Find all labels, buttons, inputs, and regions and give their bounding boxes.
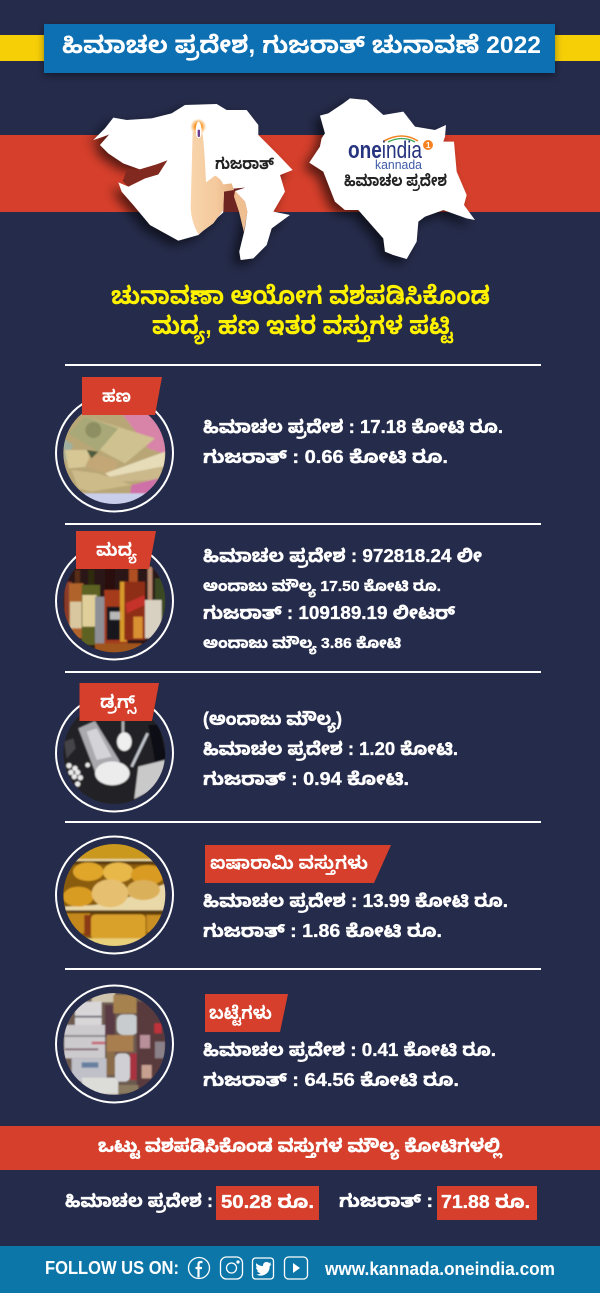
heading: list of seized items — [111, 282, 490, 345]
values: liquor: ಅಂದಾಜು ಮೌಲ್ಯ 3.86 ಕೋಟಿ — [203, 635, 401, 655]
image: drugs — [56, 694, 173, 812]
values: drugs — [203, 709, 458, 789]
icon: youtube — [284, 1257, 308, 1279]
follow us label: FOLLOW US ON: — [45, 1258, 179, 1278]
image: gold jewellery — [56, 836, 173, 954]
label: Gujarat: ಗುಜರಾತ್ — [215, 156, 274, 173]
values: liquor — [203, 546, 482, 655]
tag: money — [82, 377, 162, 415]
tag: drugs: ಡ್ರಗ್ಸ್ — [100, 692, 137, 715]
total: Gujarat — [339, 1186, 537, 1220]
values: money: ಹಿಮಾಚಲ ಪ್ರದೇಶ : 17.18 ಕೋಟಿ ರೂ. — [203, 417, 503, 439]
values: clothes: ಹಿಮಾಚಲ ಪ್ರದೇಶ : 0.41 ಕೋಟಿ ರೂ. — [203, 1040, 496, 1062]
image: liquor bottles — [56, 542, 173, 660]
icon: inked finger — [190, 119, 247, 234]
image: clothes bales — [56, 986, 173, 1102]
heading: list of seized items: ಮದ್ಯ, ಹಣ ಇತರ ವಸ್ತುಗಳ ಪಟ್ಟಿ — [152, 312, 453, 345]
values: money — [203, 417, 503, 467]
values: luxury goods: ಹಿಮಾಚಲ ಪ್ರದೇಶ : 13.99 ಕೋಟಿ ರೂ. — [203, 891, 508, 913]
total: Himachal Pradesh: ಹಿಮಾಚಲ ಪ್ರದೇಶ : — [65, 1191, 213, 1213]
footer — [0, 1246, 600, 1293]
total: Gujarat: 71.88 ರೂ. — [441, 1192, 530, 1212]
tag: luxury goods — [205, 845, 391, 883]
values: liquor: ಗುಜರಾತ್ : 109189.19 ಲೀಟರ್ — [203, 603, 456, 623]
total: Himachal Pradesh — [65, 1186, 319, 1220]
red band behind maps — [0, 135, 600, 212]
total heading band: ಒಟ್ಟು ವಶಪಡಿಸಿಕೊಂಡ ವಸ್ತುಗಳ ಮೌಲ್ಯ ಕೋಟಿಗಳಲ್ಲಿ — [98, 1136, 503, 1160]
panel: liquor — [56, 531, 482, 660]
tag: liquor: ಮದ್ಯ — [96, 540, 137, 564]
map: Gujarat with inked finger — [93, 104, 293, 260]
total: Himachal Pradesh: 50.28 ರೂ. — [221, 1192, 314, 1212]
title banner — [0, 24, 600, 73]
values: luxury goods: ಗುಜರಾತ್ : 1.86 ಕೋಟಿ ರೂ. — [203, 921, 442, 941]
values: drugs: ಹಿಮಾಚಲ ಪ್ರದೇಶ : 1.20 ಕೋಟಿ. — [203, 739, 458, 761]
icon: twitter — [252, 1258, 274, 1279]
values: drugs: (ಅಂದಾಜು ಮೌಲ್ಯ) — [203, 709, 342, 733]
icon: facebook — [188, 1258, 210, 1278]
tag: luxury goods: ಐಷಾರಾಮಿ ವಸ್ತುಗಳು — [210, 853, 368, 875]
values: drugs: ಗುಜರಾತ್ : 0.94 ಕೋಟಿ. — [203, 769, 409, 789]
image: banknotes — [56, 394, 173, 512]
total heading band — [0, 1126, 600, 1170]
logo: oneindia kannada: 1 — [426, 141, 431, 150]
tag: clothes — [205, 994, 288, 1032]
tag: money: ಹಣ — [102, 387, 131, 406]
values: money: ಗುಜರಾತ್ : 0.66 ಕೋಟಿ ರೂ. — [203, 447, 448, 467]
logo: oneindia kannada: kannada — [375, 157, 423, 172]
panel: money — [56, 377, 503, 512]
website url: www.kannada.oneindia.com — [324, 1259, 555, 1279]
logo: oneindia kannada: oneindia — [348, 137, 423, 164]
icon: instagram — [220, 1257, 242, 1279]
tag: drugs — [80, 683, 159, 721]
tag: clothes: ಬಟ್ಟೆಗಳು — [209, 1003, 272, 1026]
values: luxury goods — [203, 891, 508, 941]
label: Himachal Pradesh: ಹಿಮಾಚಲ ಪ್ರದೇಶ — [344, 173, 447, 192]
map: Himachal Pradesh with logo — [309, 98, 475, 259]
panel: luxury goods — [56, 836, 508, 954]
values: clothes — [203, 1040, 496, 1090]
values: clothes: ಗುಜರಾತ್ : 64.56 ಕೋಟಿ ರೂ. — [203, 1070, 459, 1090]
values: liquor: ಅಂದಾಜು ಮೌಲ್ಯ 17.50 ಕೋಟಿ ರೂ. — [203, 578, 441, 598]
panel: clothes — [56, 986, 496, 1102]
values: liquor: ಹಿಮಾಚಲ ಪ್ರದೇಶ : 972818.24 ಲೀ — [203, 546, 482, 568]
panel: drugs — [56, 683, 458, 812]
tag: liquor — [76, 531, 156, 569]
title banner: ಹಿಮಾಚಲ ಪ್ರದೇಶ, ಗುಜರಾತ್ ಚುನಾವಣೆ 2022 — [62, 32, 541, 61]
total: Gujarat: ಗುಜರಾತ್ : — [339, 1191, 433, 1211]
heading: list of seized items: ಚುನಾವಣಾ ಆಯೋಗ ವಶಪಡಿಸಿಕೊಂಡ — [111, 282, 490, 310]
